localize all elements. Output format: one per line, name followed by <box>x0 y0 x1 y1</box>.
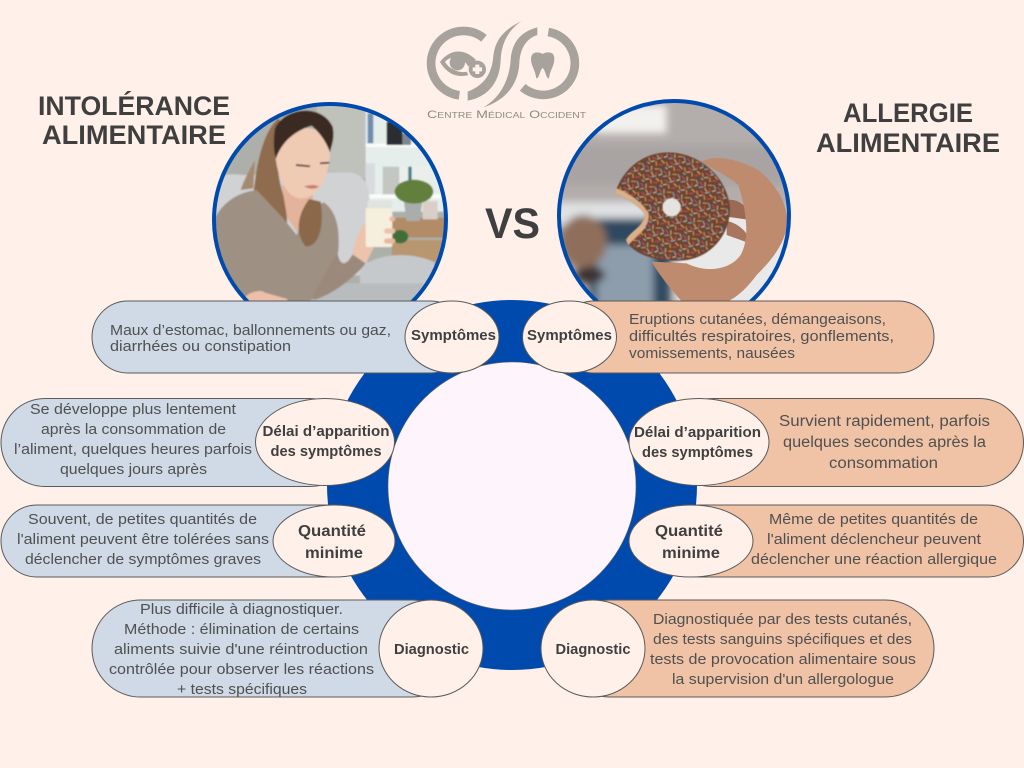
row: diagnostic, allergie <box>541 600 934 697</box>
text pill: Souvent, de petites quantités de <box>28 511 257 528</box>
text pill: des tests sanguins spécifiques et des <box>653 631 912 648</box>
VS heading: VS <box>485 200 540 248</box>
logo mark <box>431 21 575 107</box>
label bubble <box>541 600 645 697</box>
text pill: l’aliment, quelques heures parfois <box>14 441 252 458</box>
label bubble: Symptômes <box>411 328 496 344</box>
label bubble <box>379 600 483 697</box>
row: délai, intolérance <box>1 398 394 486</box>
logo: Centre Médical Occident <box>427 21 586 121</box>
text pill: consommation <box>829 455 938 472</box>
inner circle <box>388 362 636 610</box>
title: allergie alimentaire: ALLERGIE <box>843 98 973 128</box>
title: intolérance alimentaire: ALIMENTAIRE <box>42 120 226 150</box>
text pill: déclencher une réaction allergique <box>751 551 997 568</box>
text pill: vomissements, nausées <box>629 345 795 362</box>
text pill <box>558 301 934 373</box>
label bubble: des symptômes <box>642 445 753 461</box>
text pill: déclencher de symptômes graves <box>25 551 261 568</box>
text pill <box>92 301 466 373</box>
text pill: Méthode : élimination de certains <box>124 621 359 638</box>
text pill: tests de provocation alimentaire sous <box>650 651 916 668</box>
text pill: Même de petites quantités de <box>769 511 978 528</box>
label bubble <box>522 301 616 373</box>
text pill: Maux d’estomac, ballonnements ou gaz, <box>110 322 391 339</box>
text pill: après la consommation de <box>41 421 226 438</box>
text pill: aliments suivie d'une réintroduction <box>114 641 368 658</box>
text pill: quelques jours après <box>60 461 207 478</box>
text pill <box>668 398 1024 486</box>
text pill: Se développe plus lentement <box>30 401 237 418</box>
text pill: Eruptions cutanées, démangeaisons, <box>629 311 886 328</box>
text pill: contrôlée pour observer les réactions <box>109 661 374 678</box>
title: intolérance alimentaire <box>38 90 230 150</box>
label bubble <box>405 301 499 373</box>
text pill: l'aliment déclencheur peuvent <box>767 531 982 548</box>
text pill: l'aliment peuvent être tolérées sans <box>17 531 269 548</box>
row: délai, allergie <box>629 398 1024 486</box>
label bubble <box>629 505 753 577</box>
text pill: + tests spécifiques <box>177 681 307 698</box>
row: diagnostic, intolérance <box>92 600 483 698</box>
label bubble: Délai d’apparition <box>634 425 761 441</box>
text pill: Survient rapidement, parfois <box>779 413 990 430</box>
label bubble <box>256 398 394 486</box>
label bubble: Symptômes <box>527 328 612 344</box>
label bubble: minime <box>305 545 363 562</box>
label bubble: Diagnostic <box>556 642 630 658</box>
text pill <box>561 600 934 697</box>
logo text: Centre Médical Occident <box>427 109 586 121</box>
text pill: la supervision d'un allergologue <box>672 671 894 688</box>
text pill: quelques secondes après la <box>783 434 986 451</box>
photo: hand holding bitten sprinkled donut <box>557 99 791 300</box>
label bubble: Quantité <box>655 523 723 540</box>
text pill: Plus difficile à diagnostiquer. <box>140 601 343 618</box>
text pill <box>92 600 461 698</box>
row: quantité, allergie <box>629 505 1024 577</box>
title: intolérance alimentaire: INTOLÉRANCE <box>38 90 230 121</box>
central blue ring <box>327 300 697 670</box>
text pill <box>663 505 1024 577</box>
title: allergie alimentaire <box>816 98 1000 158</box>
row: symptômes, intolérance <box>92 301 499 373</box>
text pill <box>1 505 363 577</box>
row: quantité, intolérance <box>1 505 395 577</box>
text pill: diarrhées ou constipation <box>110 338 291 355</box>
label bubble: Quantité <box>298 523 366 540</box>
title: allergie alimentaire: ALIMENTAIRE <box>816 128 1000 158</box>
photo: woman with stomach ache holding milk <box>212 102 448 300</box>
label bubble: Diagnostic <box>394 642 469 658</box>
text pill <box>1 398 354 486</box>
label bubble <box>273 505 395 577</box>
row: symptômes, allergie <box>522 301 934 373</box>
label bubble: minime <box>662 545 720 562</box>
label bubble: Délai d’apparition <box>262 424 390 440</box>
text pill: Diagnostiquée par des tests cutanés, <box>653 611 912 628</box>
label bubble <box>629 398 769 486</box>
label bubble: des symptômes <box>270 444 382 460</box>
text pill: difficultés respiratoires, gonflements, <box>629 328 894 345</box>
